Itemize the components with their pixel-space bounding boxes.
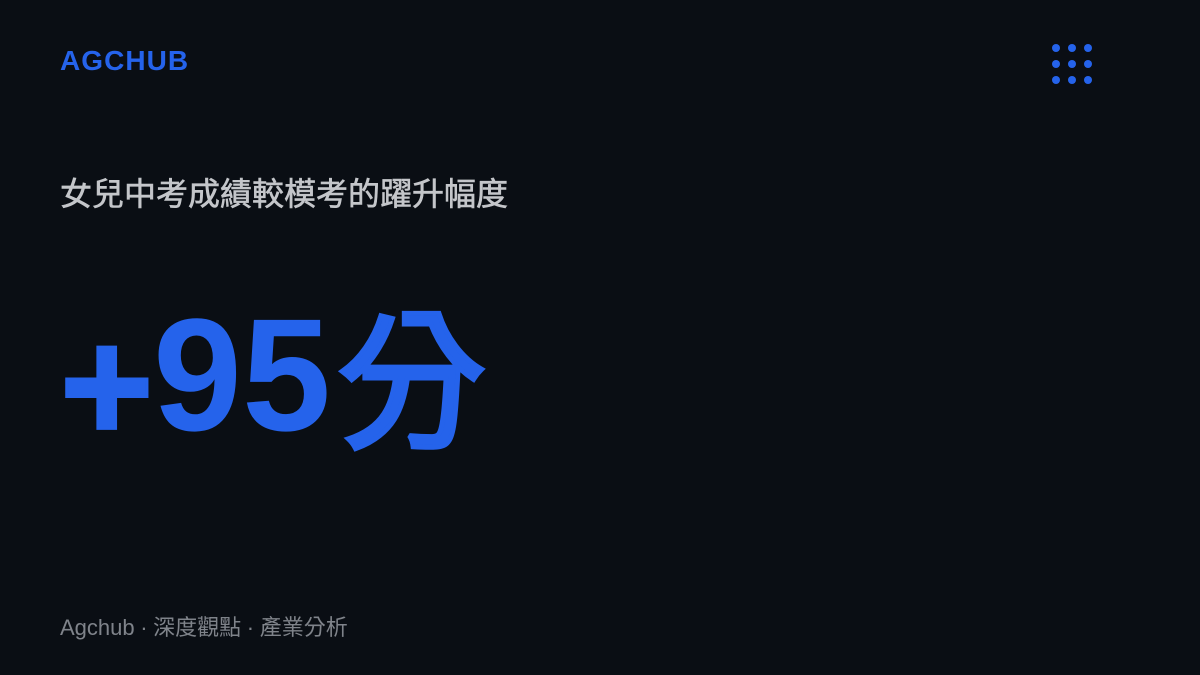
heading: 女兒中考成績較模考的躍升幅度: [60, 176, 508, 212]
brand logo text: AGCHUB: [60, 45, 189, 76]
big number: +: [60, 296, 153, 475]
icon: dot grid: [1052, 44, 1092, 84]
big number: 95: [153, 285, 331, 464]
big number: 分: [337, 263, 486, 479]
big number: [60, 263, 486, 479]
footer text: Agchub · 深度觀點 · 產業分析: [60, 615, 348, 640]
